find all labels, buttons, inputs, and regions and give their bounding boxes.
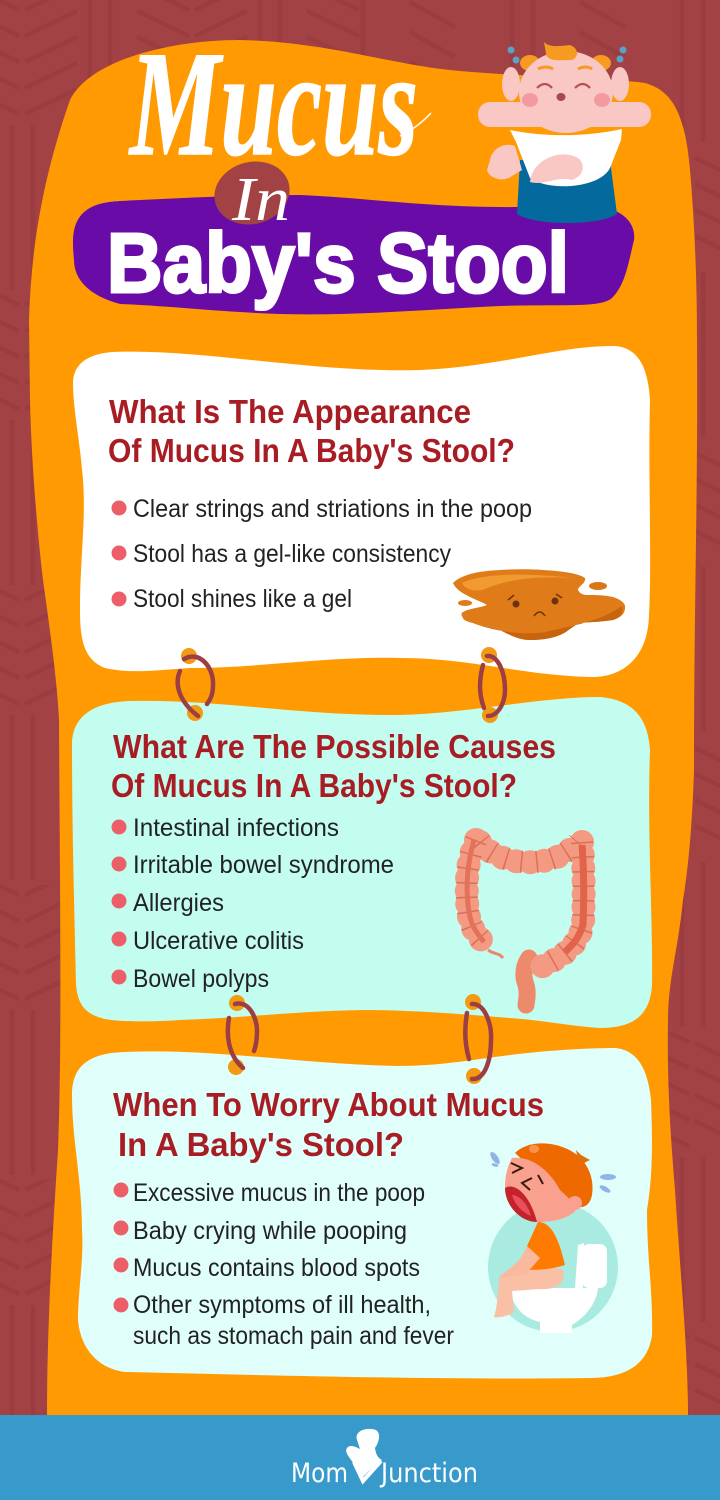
list: causes: Ulcerative colitis <box>133 927 304 955</box>
logo: MomJunction: Junction <box>379 1458 478 1489</box>
list: when to worry <box>114 1179 454 1350</box>
ring connector 3 <box>228 995 257 1075</box>
list: when to worry: Mucus contains blood spots <box>133 1254 420 1282</box>
logo: MomJunction: Mom <box>291 1458 348 1489</box>
list: appearance: Clear strings and striations in the poop <box>133 495 532 523</box>
icon: crying baby <box>478 42 651 223</box>
heading: appearance <box>108 393 515 469</box>
icon: crying child on toilet <box>488 1143 618 1333</box>
list: when to worry: such as stomach pain and fever <box>133 1322 454 1350</box>
icon: large intestine <box>467 840 584 1005</box>
ring connector 1 <box>178 648 213 721</box>
list: causes: Intestinal infections <box>133 814 339 842</box>
title: Mucus: Mucus <box>129 21 418 187</box>
list: when to worry: Other symptoms of ill health, <box>133 1291 431 1319</box>
list: causes: Irritable bowel syndrome <box>133 851 394 879</box>
title: In badge: In <box>231 166 290 234</box>
list: when to worry: Excessive mucus in the poop <box>133 1179 425 1207</box>
heading: causes <box>111 728 556 804</box>
purple title banner <box>73 195 634 314</box>
panel: appearance <box>73 346 650 677</box>
heading: causes: Of Mucus In A Baby's Stool? <box>111 767 517 804</box>
icon: sad stool puddle <box>453 569 625 640</box>
heading: causes: What Are The Possible Causes <box>113 728 556 765</box>
list: appearance: Stool has a gel-like consistency <box>133 540 451 568</box>
ring connector 2 <box>480 647 505 723</box>
heading: when to worry: When To Worry About Mucus <box>113 1086 544 1123</box>
ring connector 4 <box>465 994 491 1084</box>
title: Baby's Stool: Baby's Stool <box>107 216 569 310</box>
list: when to worry: Baby crying while pooping <box>133 1217 407 1245</box>
list: causes: Allergies <box>133 889 224 917</box>
heading: appearance: What Is The Appearance <box>109 393 471 430</box>
heading: when to worry: In A Baby's Stool? <box>118 1126 404 1163</box>
title: In badge <box>207 153 297 234</box>
panel: when to worry <box>72 1048 652 1379</box>
footer band <box>0 1415 720 1500</box>
heading: appearance: Of Mucus In A Baby's Stool? <box>108 432 515 469</box>
logo: MomJunction <box>291 1429 478 1489</box>
heading: when to worry <box>113 1086 544 1163</box>
list: causes <box>112 814 394 993</box>
list: appearance <box>112 495 532 613</box>
list: appearance: Stool shines like a gel <box>133 585 352 613</box>
list: causes: Bowel polyps <box>133 965 269 993</box>
panel: causes <box>72 697 652 1028</box>
